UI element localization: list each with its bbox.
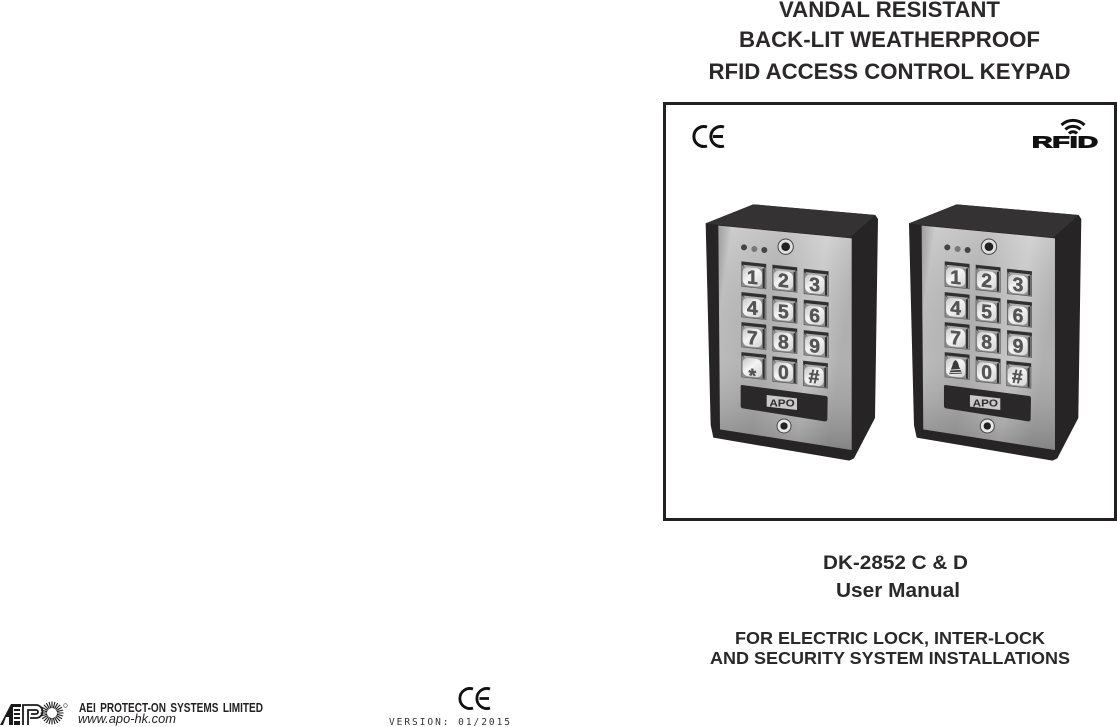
top screw: [778, 239, 793, 254]
faceplate: [922, 226, 1055, 450]
key grid: 6: [1013, 305, 1024, 328]
key grid: 3: [809, 274, 820, 297]
model and manual heading: [823, 552, 968, 602]
RFID reader window: [741, 385, 828, 421]
key grid: 4: [747, 297, 758, 320]
key grid: #: [1012, 366, 1023, 389]
panel: product photo frame: [664, 104, 1116, 520]
key grid: 2: [778, 270, 789, 293]
key grid: 9: [809, 335, 820, 358]
icon: RFID logo: RFID: [1032, 134, 1098, 152]
top screw: [981, 239, 997, 254]
model and manual heading: DK-2852 C & D: [823, 552, 968, 574]
key grid: 3: [1013, 274, 1024, 297]
icon: CE mark in frame: [694, 126, 724, 146]
key grid: 1: [950, 266, 961, 289]
application note: AND SECURITY SYSTEM INSTALLATIONS: [710, 648, 1070, 668]
key grid: [742, 262, 828, 390]
icon: CE mark footer: [460, 689, 490, 708]
RFID reader window: APO: [769, 398, 795, 409]
title: [708, 0, 1070, 84]
key grid: 2: [981, 270, 992, 293]
key grid: 0: [981, 361, 992, 384]
title: BACK-LIT WEATHERPROOF: [739, 27, 1040, 52]
key grid: 1: [747, 266, 758, 289]
key grid: 6: [809, 305, 820, 328]
key grid: #: [809, 366, 820, 389]
key grid: 0: [778, 361, 789, 384]
status LEDs: [741, 244, 767, 253]
key grid: [945, 262, 1032, 390]
RFID reader window: [944, 385, 1031, 421]
status LEDs: [944, 244, 971, 253]
model and manual heading: User Manual: [836, 579, 960, 602]
icon: APO logo: [0, 702, 67, 725]
bottom screw: [980, 419, 994, 433]
title: RFID ACCESS CONTROL KEYPAD: [708, 59, 1070, 84]
bottom screw: [777, 419, 791, 433]
key grid: 7: [950, 327, 961, 350]
key grid: 7: [747, 327, 758, 350]
housing: [706, 204, 878, 461]
application note: FOR ELECTRIC LOCK, INTER-LOCK: [735, 628, 1045, 648]
website: www.apo-hk.com: [78, 711, 176, 726]
key grid: 9: [1013, 335, 1024, 358]
key grid: 4: [950, 297, 961, 320]
application note: [710, 628, 1070, 668]
key grid: 5: [778, 301, 789, 324]
key grid: 8: [981, 331, 992, 354]
icon: RFID logo: [1032, 120, 1098, 152]
housing: [909, 204, 1081, 461]
key grid: 8: [778, 331, 789, 354]
key grid: 5: [981, 301, 992, 324]
faceplate: [718, 226, 852, 450]
keypad photo: left unit: [706, 204, 878, 461]
company name: AEI PROTECT-ON SYSTEMS LIMITED: [79, 701, 263, 715]
keypad photo: right unit: [909, 204, 1081, 461]
RFID reader window: APO: [973, 398, 998, 409]
key grid: *: [749, 365, 757, 388]
